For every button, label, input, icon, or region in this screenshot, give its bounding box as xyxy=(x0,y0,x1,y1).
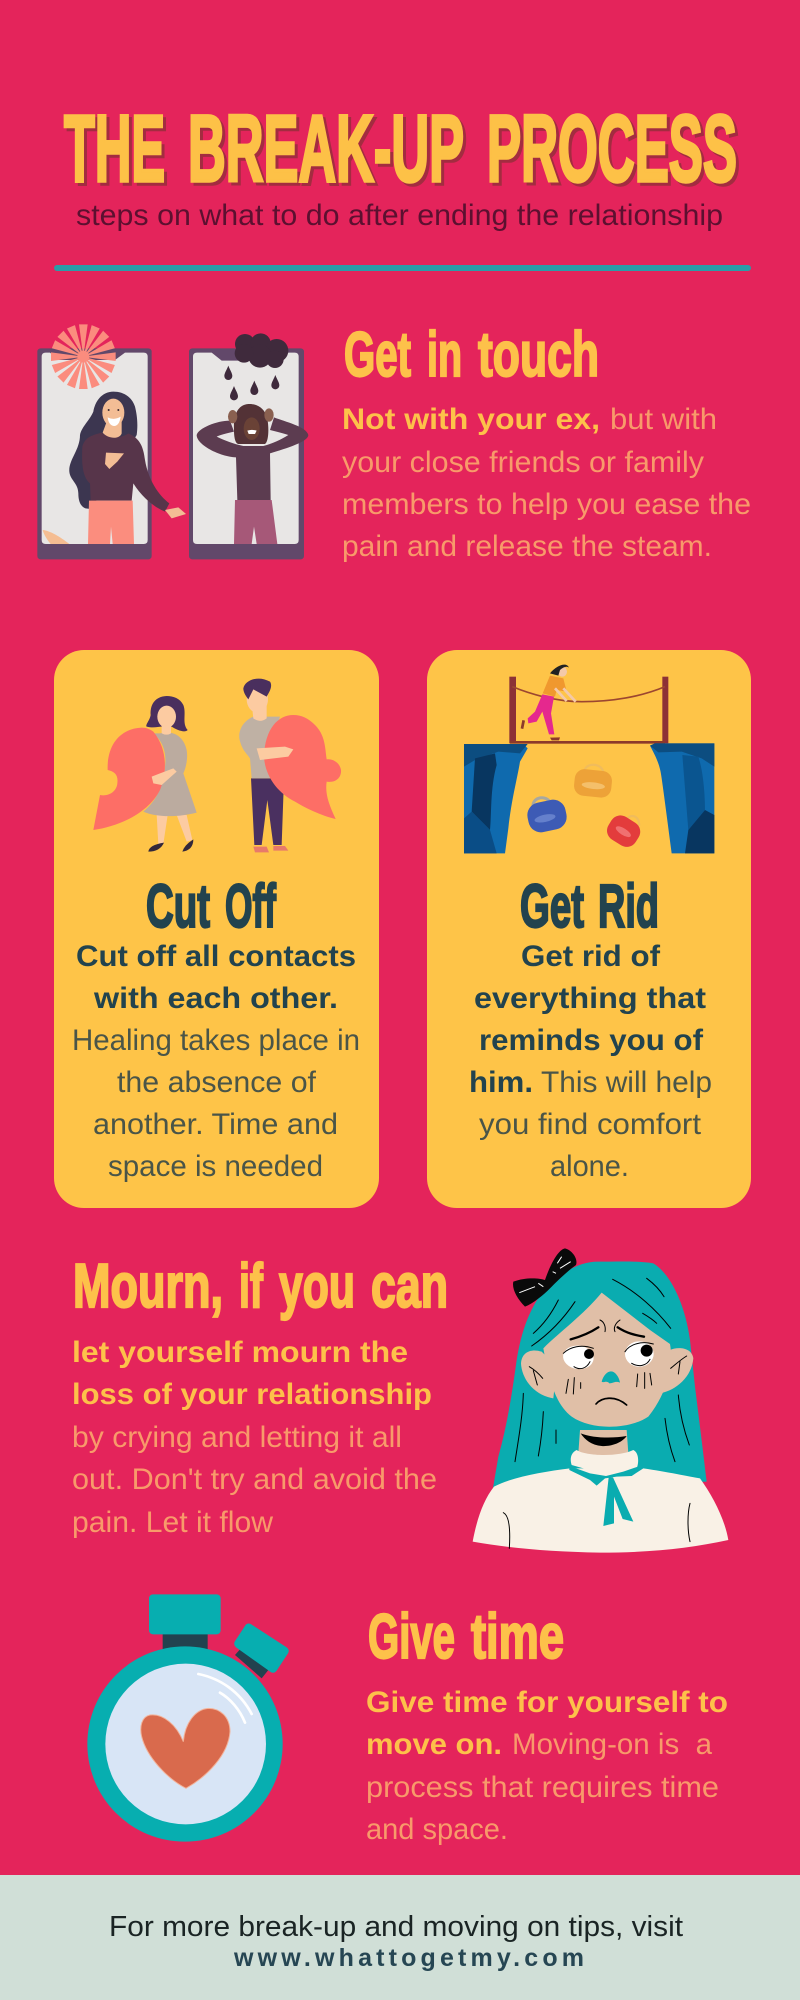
subtitle: steps on what to do after ending the relationship xyxy=(76,199,723,232)
icon: woman on bridge with falling bags xyxy=(464,665,714,853)
text: cut off body: Healing takes place in xyxy=(72,1024,360,1057)
heading: cut off: Cut xyxy=(146,872,210,940)
heading: get in touch: touch xyxy=(478,320,599,390)
text: give time body: Moving-on is a xyxy=(512,1728,712,1761)
heading: mourn: you xyxy=(279,1252,355,1321)
phone: crying woman xyxy=(189,348,308,559)
text: footer line: For more break-up and moving on tips, visit xyxy=(109,1911,683,1943)
icon: rain cloud xyxy=(224,333,288,400)
heading: get in touch: Get xyxy=(344,320,411,390)
title: BREAK-UP xyxy=(188,96,464,202)
heading: give time: time xyxy=(471,1602,564,1672)
text: give time body: move on. xyxy=(366,1728,502,1761)
text: get rid body: everything that xyxy=(474,982,706,1015)
text: get in touch body: members to help you ease the xyxy=(342,488,751,521)
text: get rid body: him. xyxy=(469,1066,533,1099)
text: mourn body xyxy=(72,1336,437,1539)
heading: cut off: Off xyxy=(225,872,276,940)
text: mourn body: pain. Let it flow xyxy=(72,1506,273,1539)
text: get in touch body: Not with your ex, xyxy=(342,403,600,436)
text: get rid body: Get rid of xyxy=(521,940,661,973)
icon: stopwatch with heart xyxy=(87,1594,289,1842)
icon: sunburst xyxy=(51,324,116,389)
text: give time body: process that requires time xyxy=(366,1771,719,1804)
text: give time body xyxy=(366,1686,728,1846)
heading: mourn: Mourn, xyxy=(73,1252,223,1321)
section: give time xyxy=(366,1602,728,1846)
text: mourn body: by crying and letting it all xyxy=(72,1421,402,1454)
heading: mourn: can xyxy=(371,1252,448,1321)
text: cut off body: Cut off all contacts xyxy=(76,940,356,973)
heading: mourn xyxy=(73,1252,448,1321)
heading: get rid: Rid xyxy=(598,872,659,940)
text: footer website: www.whattogetmy.com xyxy=(233,1944,584,1972)
text: get in touch body: pain and release the steam. xyxy=(342,530,712,563)
heading: mourn: if xyxy=(239,1252,263,1321)
text: mourn body: let yourself mourn the xyxy=(72,1336,408,1369)
icon: two phones with women xyxy=(37,324,308,559)
text: cut off body: space is needed xyxy=(108,1150,323,1183)
icon: sad girl with teal hair xyxy=(473,1248,728,1553)
icon: couple holding broken heart xyxy=(93,679,341,852)
heading: get rid: Get xyxy=(520,872,584,940)
text: cut off body: the absence of xyxy=(117,1066,317,1099)
footer xyxy=(0,1875,800,2000)
heading: get in touch xyxy=(344,320,599,390)
text: give time body: and space. xyxy=(366,1813,508,1846)
text: get rid body: This will help xyxy=(541,1066,712,1099)
heading: give time: Give xyxy=(368,1602,455,1672)
heading: get in touch: in xyxy=(427,320,462,390)
title: THE xyxy=(64,96,165,202)
text: cut off body: with each other. xyxy=(93,982,338,1015)
text: mourn body: loss of your relationship xyxy=(72,1378,432,1411)
text: get rid body: alone. xyxy=(550,1150,629,1183)
section: mourn xyxy=(72,1252,448,1539)
text: get rid body xyxy=(469,940,712,1183)
panel: cut off xyxy=(54,650,379,1208)
text: get rid body: you find comfort xyxy=(479,1108,702,1141)
text: cut off body: another. Time and xyxy=(93,1108,338,1141)
phone: happy woman xyxy=(37,348,186,559)
text: give time body: Give time for yourself to xyxy=(366,1686,728,1719)
heading: give time xyxy=(368,1602,564,1672)
text: get in touch body: but with xyxy=(610,403,717,436)
text: cut off body xyxy=(72,940,360,1183)
text: get in touch body xyxy=(342,403,751,563)
section: get in touch xyxy=(342,320,751,563)
text: get rid body: reminds you of xyxy=(479,1024,704,1057)
text: mourn body: out. Don't try and avoid the xyxy=(72,1463,437,1496)
panel: get rid xyxy=(427,650,751,1208)
text: get in touch body: your close friends or family xyxy=(342,446,704,479)
